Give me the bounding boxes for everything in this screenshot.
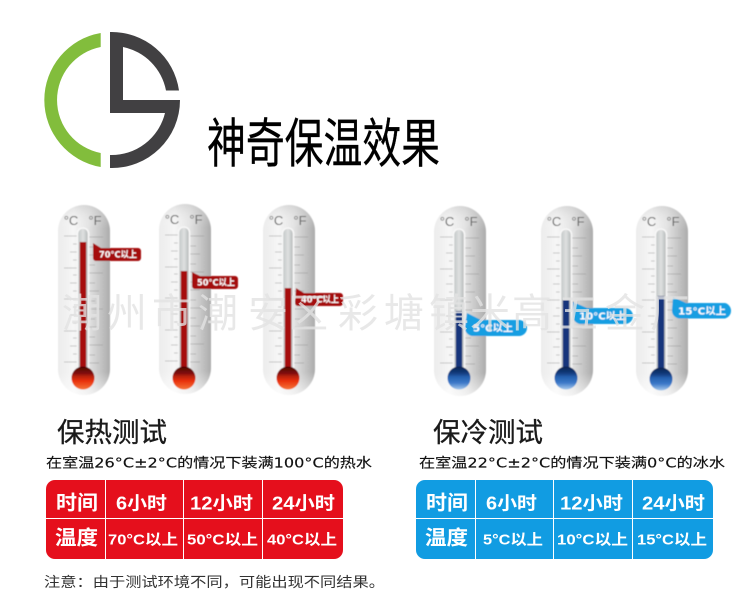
label: 50°C以上 <box>192 272 238 289</box>
text: hot test conditions: 在室温26°C±2°C的情况下装满100°C的热水 <box>46 454 373 472</box>
label: 40°C以上: 40°C以上 <box>301 294 339 306</box>
table: hot results: 70°C以上 <box>108 532 178 548</box>
thermometer: hot 24h 40°C <box>263 205 343 395</box>
table: cold results: 12小时 <box>560 494 623 514</box>
label: 50°C以上: 50°C以上 <box>197 276 235 288</box>
table: cold results: 15°C以上 <box>637 532 707 548</box>
thermometer: hot 6h 70°C <box>58 205 141 395</box>
table: cold results: 24小时 <box>642 494 705 514</box>
label: 15°C以上 <box>672 297 731 318</box>
thermometer: cold 6h 5°C <box>434 206 527 396</box>
logo <box>44 32 180 168</box>
table: hot results: 时间 <box>56 492 98 514</box>
table: cold results <box>416 480 713 559</box>
label: 15°C以上: 15°C以上 <box>678 304 726 318</box>
table: hot results: 40°C以上 <box>267 532 337 548</box>
table: hot results <box>46 480 343 559</box>
table: cold results: 时间 <box>426 492 468 514</box>
thermometer: hot 12h 50°C <box>159 204 238 394</box>
thermometer: cold 12h 10°C <box>541 206 633 396</box>
label: 5°C以上: 5°C以上 <box>473 322 513 334</box>
label: 10°C以上: 10°C以上 <box>579 310 626 322</box>
table: cold results: 温度 <box>425 526 468 550</box>
table: hot results: 12小时 <box>190 494 253 514</box>
table: hot results: 6小时 <box>116 494 167 514</box>
label: 70°C以上 <box>93 243 141 261</box>
note: 注意：由于测试环境不同，可能出现不同结果。 <box>44 574 385 590</box>
heading: cold test: 保冷测试 <box>433 418 543 448</box>
table: cold results: 6小时 <box>486 494 537 514</box>
label: 10°C以上 <box>573 302 633 324</box>
logo: green arc <box>44 33 101 167</box>
watermark: 潮州市潮安区彩塘镇米高五金厂 <box>62 292 690 336</box>
title: 神奇保温效果 <box>207 115 440 174</box>
table: cold results: 10°C以上 <box>557 532 628 548</box>
table: hot results: 24小时 <box>272 494 335 514</box>
table: hot results: 温度 <box>55 526 98 550</box>
label: 40°C以上 <box>295 288 343 306</box>
table: cold results: 5°C以上 <box>483 532 543 548</box>
label: 70°C以上: 70°C以上 <box>99 248 137 260</box>
thermometer: cold 24h 15°C <box>636 206 731 396</box>
text: cold test conditions: 在室温22°C±2°C的情况下装满0°C的冰水 <box>419 454 726 472</box>
label: 5°C以上 <box>465 313 527 336</box>
logo: dark S shape <box>110 32 180 168</box>
table: hot results: 50°C以上 <box>187 532 258 548</box>
heading: hot test: 保热测试 <box>57 418 167 448</box>
